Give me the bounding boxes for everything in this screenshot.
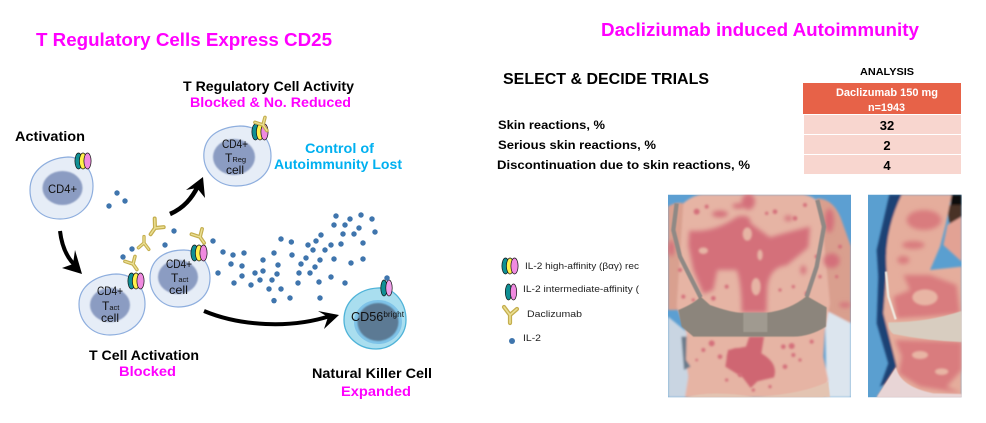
heading: select and decide trials: SELECT & DECIDE TRIALS bbox=[503, 71, 709, 88]
cell: activated T cell 2: cell bbox=[169, 283, 188, 297]
table caption: ANALYSIS bbox=[860, 66, 914, 78]
label: T cell activation blocked: Blocked bbox=[119, 363, 176, 379]
title: Daclizumab autoimmunity: Dacliziumab induced Autoimmunity bbox=[601, 20, 919, 40]
arrow: activation to activated T cell bbox=[60, 231, 82, 274]
antibody on activated T cell 2 bbox=[191, 227, 209, 246]
cell: activated T cell 1: cell bbox=[101, 311, 119, 325]
photo: side with rash bbox=[868, 195, 962, 397]
receptor on activated T cell 2 bbox=[191, 245, 207, 261]
legend: daclizumab: Daclizumab bbox=[527, 309, 582, 320]
photo detail: lower back rash bbox=[725, 337, 775, 388]
cell: activated T cell 2 bbox=[150, 227, 210, 307]
cell: natural killer CD56 bright: CD56 bbox=[351, 309, 384, 324]
dots: free IL-2 upper left bbox=[106, 190, 177, 260]
cell: activated T cell 1: act bbox=[109, 303, 120, 312]
heading: T regulatory cell activity: Blocked & No. Reduced bbox=[190, 94, 351, 110]
cell: T regulatory: T bbox=[225, 151, 232, 165]
antibodies: free daclizumab bbox=[138, 219, 165, 249]
arrow: to T regulatory cell bbox=[170, 177, 205, 214]
antibody on activated T cell 1 bbox=[125, 255, 142, 272]
table header bbox=[803, 83, 961, 114]
row: discontinuation: 4 bbox=[883, 158, 891, 173]
cell: activated T cell 1: CD4+ bbox=[97, 284, 123, 298]
cell: T regulatory: CD4+ bbox=[222, 137, 248, 151]
dots: IL-2 cloud bbox=[210, 212, 390, 303]
arrow: to natural killer cell bbox=[204, 311, 339, 329]
callout: control of autoimmunity lost bbox=[274, 140, 402, 172]
antibody on T regulatory cell bbox=[255, 116, 272, 133]
legend: IL-2: IL-2 bbox=[523, 333, 541, 344]
legend bbox=[502, 258, 640, 344]
row: skin reactions bbox=[498, 115, 961, 134]
row: skin reactions: 32 bbox=[880, 118, 894, 133]
receptor on T regulatory cell bbox=[252, 124, 268, 140]
cell: T regulatory: cell bbox=[226, 163, 244, 177]
row: discontinuation bbox=[497, 155, 961, 174]
label: natural killer cell expanded bbox=[312, 365, 432, 399]
row: serious skin reactions bbox=[498, 135, 961, 154]
cell: T regulatory: Reg bbox=[232, 155, 246, 164]
table header: n=1943 bbox=[868, 102, 905, 114]
cell: activated T cell 1: T bbox=[102, 299, 109, 313]
receptor on activated T cell 1 bbox=[128, 273, 144, 289]
row: serious skin reactions: 2 bbox=[883, 138, 891, 153]
receptor on NK cell bbox=[381, 280, 392, 296]
label: T cell activation blocked: T Cell Activation bbox=[89, 347, 199, 363]
label: T cell activation blocked bbox=[89, 347, 199, 379]
heading: activation: Activation bbox=[15, 128, 85, 144]
heading: T regulatory cell activity: T Regulatory Cell Activity bbox=[183, 78, 354, 94]
cell: T regulatory bbox=[204, 116, 272, 186]
label: natural killer cell expanded: Expanded bbox=[341, 383, 411, 399]
cell: natural killer CD56 bright: bright bbox=[383, 309, 405, 319]
cell: natural killer CD56 bright bbox=[344, 280, 406, 349]
cell: activated T cell 2: act bbox=[178, 275, 189, 284]
table: skin reaction results bbox=[497, 66, 961, 174]
title: T regulatory cells: T Regulatory Cells Express CD25 bbox=[36, 30, 332, 50]
callout: control of autoimmunity lost: Autoimmunity Lost bbox=[274, 156, 402, 172]
legend: intermediate-affinity receptor: IL-2 intermediate-affinity ( bbox=[523, 284, 640, 295]
label: natural killer cell expanded: Natural Killer Cell bbox=[312, 365, 432, 381]
row: discontinuation: Discontinuation due to skin reactions, % bbox=[497, 158, 750, 172]
row: skin reactions: Skin reactions, % bbox=[498, 118, 605, 132]
table header: Daclizumab 150 mg bbox=[836, 87, 938, 99]
receptor on activation cell bbox=[75, 153, 91, 169]
cell: activated T cell 2: CD4+ bbox=[166, 257, 192, 271]
legend: high-affinity receptor: IL-2 high-affinity (βαγ) rec bbox=[525, 261, 639, 272]
heading: T regulatory cell activity bbox=[183, 78, 354, 110]
row: serious skin reactions: Serious skin reactions, % bbox=[498, 138, 656, 152]
cell: activated T cell 2: T bbox=[171, 271, 178, 285]
cell: activation CD4+ bbox=[30, 153, 93, 219]
callout: control of autoimmunity lost: Control of bbox=[305, 140, 374, 156]
cell: activated T cell 1 bbox=[79, 255, 145, 335]
photo: back with rash bbox=[668, 194, 851, 397]
cell: activation CD4+: CD4+ bbox=[48, 182, 77, 196]
